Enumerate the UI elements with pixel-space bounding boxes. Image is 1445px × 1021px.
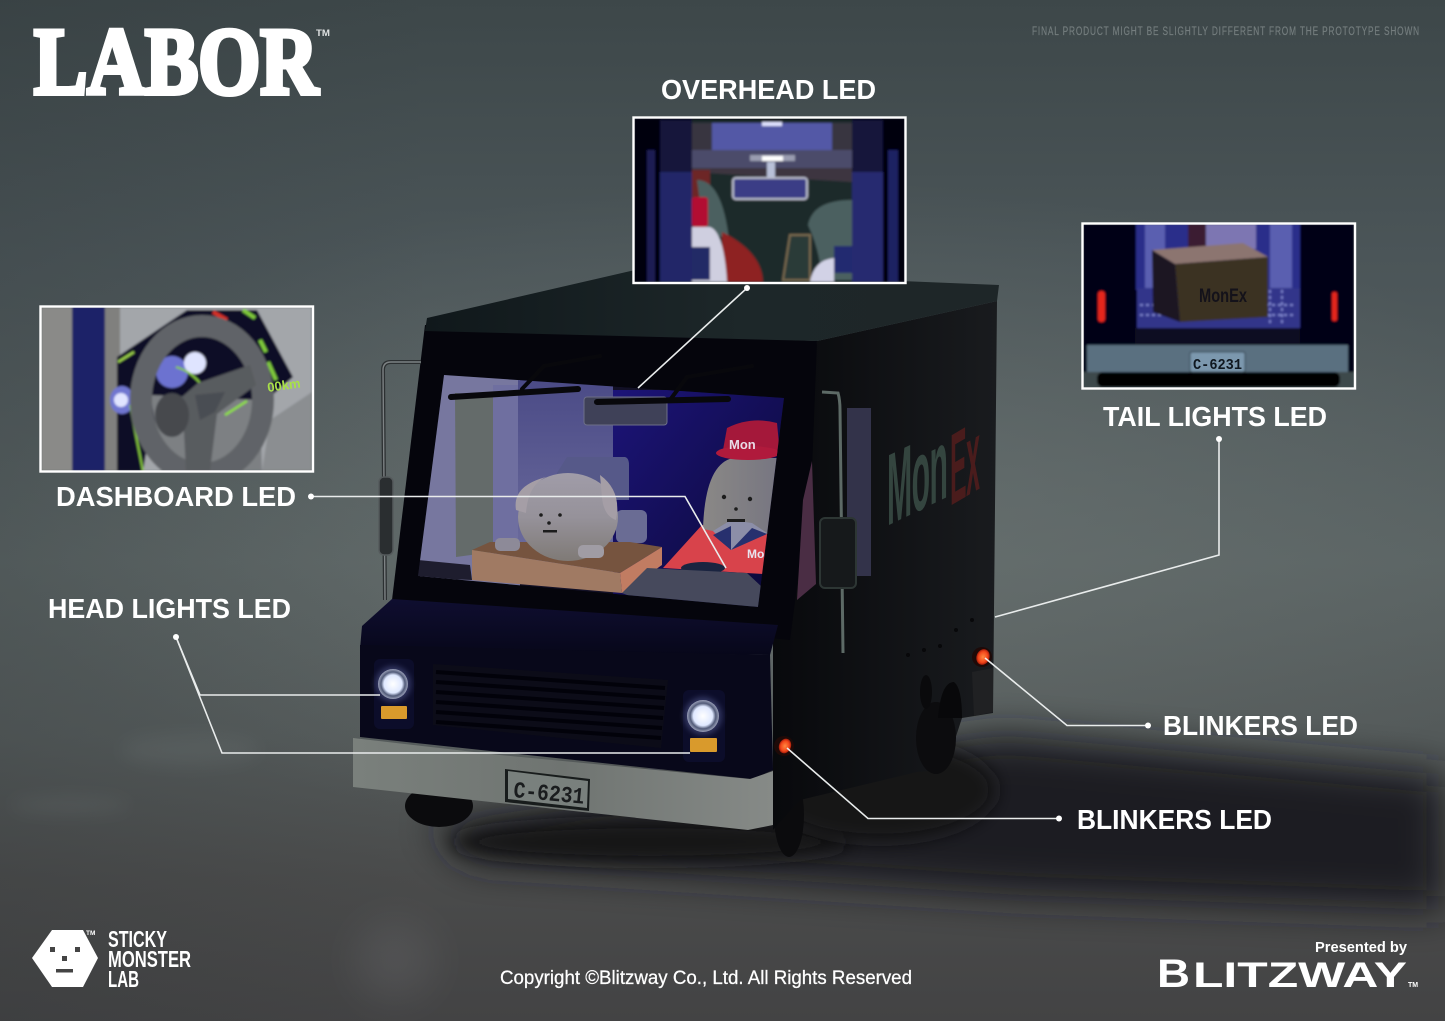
- title: LABOR logo: LABOR: [34, 8, 319, 114]
- copyright line: Copyright ©Blitzway Co., Ltd. All Rights Reserved: [500, 968, 912, 989]
- bumper: [353, 738, 773, 830]
- callout: tail lights LED label: TAIL LIGHTS LED: [1103, 401, 1327, 432]
- front grille panel: [360, 645, 773, 779]
- rear bumper corner: [972, 668, 993, 716]
- inset: tail lights photo: C-6231: [1193, 357, 1242, 374]
- license plate: C-6231: [512, 778, 585, 811]
- dog character: [495, 473, 618, 561]
- door pillar window: [797, 461, 816, 600]
- rear blinker: [972, 647, 992, 667]
- callout line: head lights LED: [173, 634, 690, 753]
- rear wheel: [916, 702, 956, 774]
- side rivets: [906, 618, 974, 657]
- callout line: tail lights LED: [995, 436, 1222, 617]
- Blitzway logo: [1157, 939, 1418, 996]
- cargo box: [472, 542, 662, 593]
- Blitzway logo: Presented by: [1315, 939, 1408, 956]
- hood: [360, 599, 778, 655]
- truck cab front: [392, 325, 817, 640]
- driver character: [663, 420, 780, 574]
- callout line: front blinkers LED: [787, 748, 1062, 822]
- front blinker: [774, 736, 794, 756]
- grille: [433, 664, 668, 748]
- inset: dashboard photo: 00km: [266, 375, 301, 395]
- Blitzway logo: LITZWAY: [1193, 956, 1407, 995]
- Sticky Monster Lab logo: STICKY: [108, 926, 167, 952]
- MonEx side lettering: [887, 396, 980, 549]
- right headlight: [683, 690, 725, 762]
- Sticky Monster Lab logo: LAB: [108, 966, 139, 992]
- left wiper: [451, 356, 600, 397]
- inset: tail lights photo: [1082, 224, 1355, 388]
- callout: overhead LED label: OVERHEAD LED: [661, 74, 876, 105]
- Blitzway logo: B: [1157, 952, 1190, 996]
- inset: tail lights photo: MonEx: [1199, 286, 1247, 307]
- callout line: overhead LED: [638, 285, 750, 388]
- callout: dashboard LED label: DASHBOARD LED: [56, 481, 296, 512]
- inset: dashboard photo: [40, 306, 313, 474]
- callout: head lights LED label: HEAD LIGHTS LED: [48, 593, 291, 624]
- license plate: [505, 769, 590, 811]
- callout line: rear blinkers LED: [985, 658, 1151, 728]
- driver character: Mon: [729, 437, 756, 452]
- front left wheel: [405, 785, 473, 827]
- Sticky Monster Lab logo: TM: [86, 930, 95, 937]
- callout: rear blinkers LED label: BLINKERS LED: [1163, 710, 1358, 741]
- roof: [425, 270, 999, 341]
- windshield interior: [418, 375, 788, 610]
- truck side panel: [773, 301, 997, 830]
- right door rail and handle: [820, 392, 856, 653]
- callout: front blinkers LED label: BLINKERS LED: [1077, 804, 1272, 835]
- MonEx side lettering: Mon: [887, 407, 947, 549]
- Blitzway logo: TM: [1408, 982, 1418, 989]
- front right wheel: [774, 773, 804, 857]
- dashboard: [622, 562, 762, 607]
- delivery truck: [353, 270, 999, 857]
- title: LABOR logo: TM: [316, 28, 330, 38]
- Sticky Monster Lab logo: MONSTER: [108, 946, 191, 972]
- left mirror rail: [379, 362, 421, 600]
- back seat: [557, 457, 647, 543]
- MonEx side lettering: Ex: [950, 396, 980, 528]
- driver character: Mon: [747, 547, 772, 561]
- wheel arch recess: [938, 682, 962, 718]
- callout line: dashboard LED: [308, 494, 726, 568]
- Sticky Monster Lab logo: [32, 926, 191, 992]
- inset: overhead LED photo: [634, 118, 906, 283]
- rear view mirror: [584, 397, 667, 425]
- left headlight: [374, 659, 414, 729]
- right wiper: [597, 366, 752, 402]
- rear vent recess: [920, 675, 932, 709]
- icon: monster face hexagon: [32, 930, 98, 987]
- side window: [847, 408, 871, 576]
